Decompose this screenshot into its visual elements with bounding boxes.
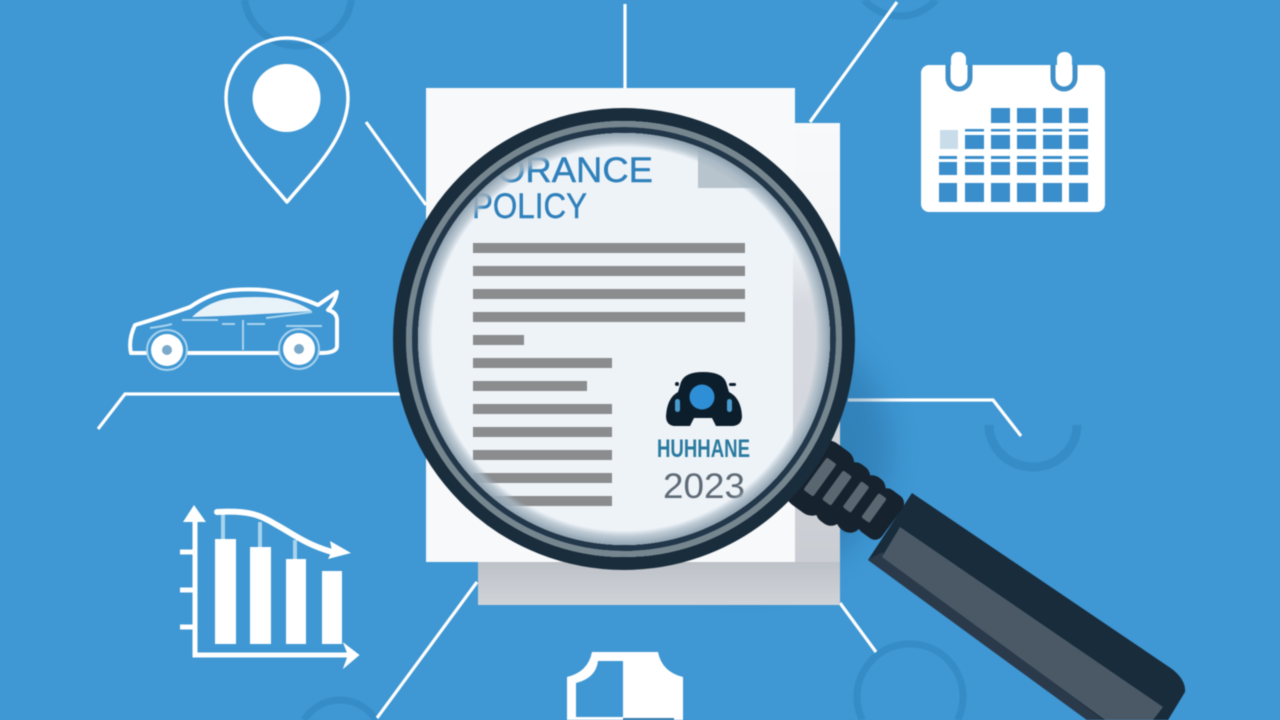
car logo [666, 372, 742, 426]
document title: POLICY [472, 187, 587, 226]
icon: declining bar chart [180, 505, 358, 666]
connector lines [98, 2, 1021, 718]
lens shadow on background [600, 315, 890, 585]
icon: car [130, 289, 337, 370]
icon: magnifying glass handle [780, 434, 1185, 720]
text lines [473, 243, 745, 506]
magnifying glass lens [400, 114, 848, 564]
document side shade in lens [792, 264, 821, 439]
document: back sheet with lower shadow [426, 88, 840, 605]
icon: shield [567, 652, 683, 720]
glass edge shading [418, 133, 830, 545]
decorative faint circles [245, 0, 1077, 720]
icon: location pin [226, 38, 348, 202]
folded corner [698, 153, 756, 188]
document title: ORANCE [497, 151, 653, 190]
icon: calendar [921, 46, 1105, 212]
year: 2023 [663, 467, 745, 506]
document title [474, 156, 652, 220]
logo caption: HUHHANE [657, 435, 750, 463]
